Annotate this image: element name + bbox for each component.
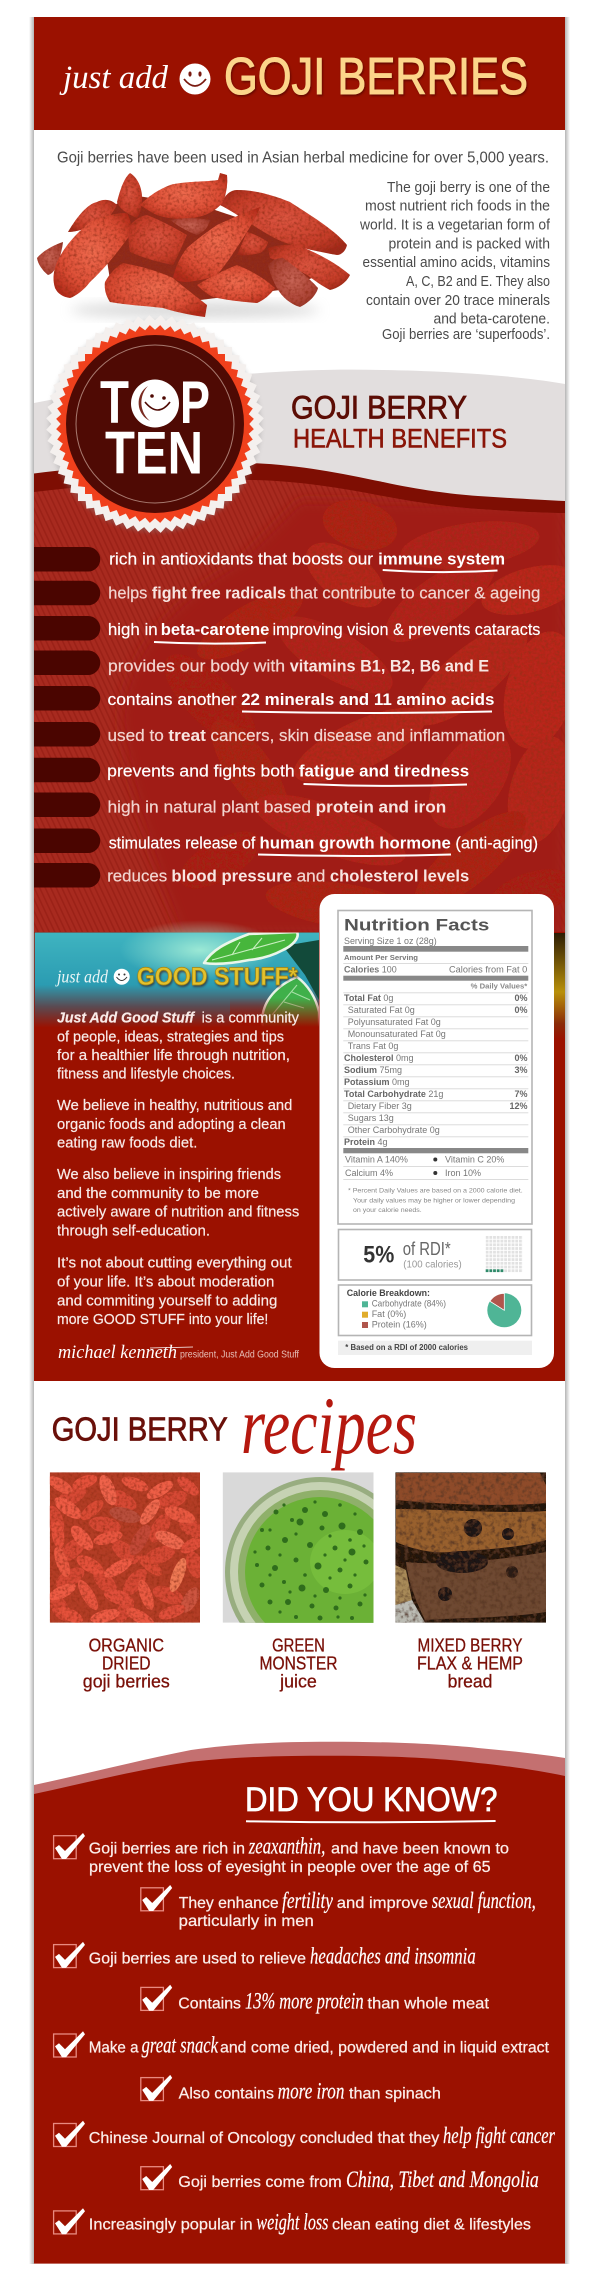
nutrition facts table: Sugars 13g (348, 1113, 394, 1123)
nutrition facts table: Vitamin A 140% (345, 1154, 408, 1164)
caption: ORGANIC (89, 1636, 164, 1656)
benefit 10: and (297, 867, 325, 886)
benefit 6: cancers, skin disease and inflammation (210, 726, 505, 745)
title: GOJI BERRIES (224, 48, 528, 106)
benefit 2 (34, 581, 540, 605)
fact 4: than whole meat (367, 1996, 490, 2012)
nutrition facts table: Monounsaturated Fat 0g (348, 1029, 446, 1039)
community text: is a community (202, 1011, 300, 1027)
benefit 9: human growth hormone (260, 833, 451, 852)
description paragraph: Goji berries are ‘superfoods’. (382, 326, 550, 343)
fact 4 (141, 1985, 490, 2014)
nutrition facts table: Sodium 75mg (344, 1065, 402, 1075)
fact 9: Increasingly popular in (89, 2217, 253, 2234)
benefit 4 (34, 650, 489, 676)
benefit 9 (34, 828, 538, 856)
benefit 5: 22 minerals and 11 amino acids (241, 690, 494, 709)
caption: MONSTER (260, 1653, 338, 1673)
nutrition facts table: Amount Per Serving (344, 953, 418, 962)
heading: goji berry health benefits: GOJI BERRY (291, 389, 467, 425)
community text: and the community to be more (57, 1186, 259, 1202)
benefit 7: prevents and fights both (107, 762, 295, 781)
signature: president, Just Add Good Stuff (180, 1350, 299, 1361)
fact 9 (54, 2208, 531, 2235)
community text: and commiting yourself to adding (57, 1293, 277, 1309)
pie chart (487, 1293, 521, 1327)
community text: of your life. It’s about moderation (57, 1275, 274, 1291)
panel: good stuff (34, 920, 565, 1381)
benefit 4: vitamins B1, B2, B6 and E (290, 657, 489, 676)
heading: goji berry recipes: recipes (241, 1380, 417, 1471)
caption (260, 1636, 338, 1691)
rdi box: 5% (363, 1241, 394, 1268)
fact 1: zeaxanthin, (248, 1834, 325, 1859)
fact 1: and have been known to (331, 1841, 509, 1858)
signature: michael kenneth (58, 1342, 177, 1363)
benefit 10: reduces (107, 867, 167, 886)
nutrition facts table: Vitamin C 20% (445, 1154, 504, 1164)
benefit 3: high in (108, 620, 158, 639)
description paragraph (359, 179, 551, 343)
nutrition facts table: Nutrition Facts (344, 916, 489, 935)
benefit 1 (34, 547, 505, 572)
nutrition facts table: Dietary Fiber 3g (348, 1101, 412, 1111)
nutrition facts table: Calories from Fat 0 (449, 965, 527, 975)
description paragraph: The goji berry is one of the (387, 179, 550, 196)
caption: bread (448, 1671, 492, 1691)
nutrition facts table: 0% (514, 993, 528, 1003)
icon: smiley (114, 969, 130, 985)
nutrition facts table: Cholesterol 0mg (344, 1053, 414, 1063)
grey wave band (34, 370, 565, 530)
good stuff logo: GOOD STUFF* (137, 963, 298, 991)
signature (58, 1342, 299, 1363)
calorie breakdown box: Fat (0%) (372, 1309, 406, 1319)
TEN: TEN (105, 420, 203, 486)
caption: juice (279, 1671, 317, 1691)
illustration: green leaves (202, 932, 319, 1026)
fact 5: great snack (142, 2033, 219, 2058)
community text: for a healthier life through nutrition, (57, 1048, 290, 1064)
fact 8 (141, 2164, 539, 2192)
fact 8: Goji berries come from (178, 2174, 342, 2191)
fact 2: sexual function, (432, 1888, 536, 1913)
description paragraph: essential amino acids, vitamins (362, 254, 550, 271)
fact 7 (54, 2121, 556, 2148)
benefit 5 (34, 686, 494, 713)
calorie breakdown box: Calorie Breakdown: (347, 1288, 430, 1299)
photo: green juice (222, 1472, 374, 1623)
community text: organic foods and adopting a clean (57, 1117, 286, 1133)
benefit 2: fight free radicals (152, 583, 286, 602)
footnote: * Based on a RDI of 2000 calories (345, 1343, 469, 1352)
fact 7: help fight cancer (443, 2123, 556, 2148)
nutrition facts table: Calcium 4% (345, 1168, 393, 1178)
benefit 8: high in natural plant based (108, 798, 311, 817)
fact 2: They enhance (179, 1895, 279, 1912)
fact 5: Make a (89, 2040, 139, 2057)
description paragraph: contain over 20 trace minerals (366, 292, 550, 309)
fact 2 (141, 1885, 536, 1930)
benefit 9: (anti-aging) (455, 833, 538, 852)
just add: just add (59, 60, 168, 96)
nutrition facts table: % Daily Values* (471, 983, 528, 990)
community text: Just Add Good Stuff (57, 1011, 196, 1027)
rdi box: (100 calories) (403, 1260, 462, 1271)
community text: of people, ideas, strategies and tips (57, 1030, 284, 1046)
benefit 1: rich in antioxidants that boosts our (109, 550, 373, 569)
fact 8: China, Tibet and Mongolia (346, 2167, 539, 2192)
fact 5: and come dried, powdered and in liquid extract (220, 2040, 550, 2057)
fact 2: fertility (282, 1888, 334, 1913)
intro line: Goji berries have been used in Asian herbal medicine for over 5,000 years. (57, 150, 549, 166)
fact 3: headaches and insomnia (310, 1944, 476, 1969)
community text: We believe in healthy, nutritious and (57, 1098, 292, 1114)
benefit 3: improving vision & prevents cataracts (272, 620, 540, 639)
benefit 3 (34, 616, 540, 644)
benefit 4: provides our body with (108, 657, 285, 676)
benefit 8: protein and iron (316, 798, 446, 817)
nutrition facts table: Other Carbohydrate 0g (348, 1125, 440, 1135)
nutrition facts table: Calories 100 (344, 965, 397, 975)
benefit 5: contains another (108, 690, 237, 709)
rdi box (338, 1230, 532, 1280)
photo: bread (395, 1472, 546, 1623)
benefit 6 (34, 722, 505, 746)
heading: goji berry health benefits: HEALTH BENEFITS (293, 424, 507, 454)
fact 4: Contains (178, 1996, 241, 2012)
nutrition facts table: Saturated Fat 0g (348, 1005, 415, 1015)
fact 9: clean eating diet & lifestyles (332, 2217, 531, 2234)
caption (83, 1636, 170, 1691)
heading: goji berry recipes: GOJI BERRY (52, 1411, 228, 1448)
benefit 3: beta-carotene (161, 620, 269, 639)
community text: more GOOD STUFF into your life! (57, 1312, 268, 1328)
community text: We also believe in inspiring friends (57, 1167, 281, 1183)
badge: top ten (46, 315, 264, 533)
community text: fitness and lifestyle choices. (57, 1067, 235, 1083)
nutrition facts table (338, 910, 532, 1224)
rdi box: of RDI* (403, 1239, 451, 1259)
nutrition facts table: Your daily values may be higher or lower depending (353, 1198, 515, 1205)
wave: pale red band (34, 1742, 565, 1800)
benefit 9: stimulates release of (109, 833, 256, 852)
nutrition facts table: Protein 4g (344, 1137, 388, 1147)
nutrition facts table: on your calorie needs. (353, 1207, 422, 1214)
nutrition facts table: Potassium 0mg (344, 1077, 410, 1087)
TOP (100, 369, 210, 436)
fact 6: more iron (278, 2078, 344, 2103)
description paragraph: protein and is packed with (388, 236, 550, 253)
panel: nutrition (320, 894, 554, 1368)
nutrition facts table: Iron 10% (445, 1168, 481, 1178)
fact 3: Goji berries are used to relieve (89, 1951, 306, 1968)
nutrition facts table: * Percent Daily Values are based on a 2000 calorie diet. (348, 1188, 523, 1195)
community text: It’s not about cutting everything out (57, 1256, 292, 1272)
nutrition facts table: 0% (514, 1005, 528, 1015)
description paragraph: world. It is a vegetarian form of (359, 217, 551, 234)
just add: just add (55, 967, 109, 987)
benefit 10 (34, 863, 469, 888)
recipe: green monster juice (222, 1472, 374, 1692)
icon: smiley O (131, 380, 179, 428)
description paragraph: A, C, B2 and E. They also (406, 273, 550, 290)
illustration: pile of goji berries (37, 173, 350, 318)
benefit 6: treat (168, 726, 206, 745)
nutrition facts table: Total Carbohydrate 21g (344, 1089, 443, 1099)
nutrition facts table: 12% (509, 1101, 528, 1111)
heading: goji berry recipes (52, 1380, 417, 1471)
fact 4: 13% more protein (245, 1988, 364, 2014)
community text: eating raw foods diet. (57, 1136, 197, 1152)
fact 1 (54, 1833, 509, 1876)
community text: through self-education. (57, 1223, 210, 1239)
caption: GREEN (272, 1636, 325, 1656)
fact 1: prevent the loss of eyesight in people over the age of 65 (89, 1859, 491, 1876)
benefit 10: blood pressure (171, 867, 292, 886)
fact 2: and improve (337, 1895, 428, 1912)
benefit 7 (34, 758, 469, 786)
benefit 2: that contribute to cancer & ageing (290, 583, 540, 602)
caption: goji berries (83, 1671, 170, 1691)
benefit 10: cholesterol levels (330, 867, 469, 886)
fact 3 (54, 1942, 476, 1969)
benefit 7: fatigue and tiredness (299, 762, 469, 781)
benefit 1: immune system (378, 550, 505, 569)
nutrition facts table: Polyunsaturated Fat 0g (348, 1017, 441, 1027)
fact 6 (141, 2075, 441, 2103)
nutrition facts table: 3% (514, 1065, 528, 1075)
fact 9: weight loss (256, 2210, 328, 2235)
dot grid (486, 1236, 523, 1273)
fact 2: particularly in men (179, 1913, 314, 1930)
description paragraph: and beta-carotene. (434, 311, 550, 328)
list: ten health benefits (34, 547, 540, 888)
nutrition facts table: 0% (514, 1053, 528, 1063)
panel: top ten benefits background (34, 470, 588, 937)
benefit 6: used to (108, 726, 164, 745)
TOP: P (180, 369, 210, 436)
nutrition facts table: Total Fat 0g (344, 993, 393, 1003)
nutrition facts table: 7% (514, 1089, 528, 1099)
benefit 2: helps (108, 583, 147, 602)
footnote (338, 1341, 532, 1355)
photo: dried goji berries (50, 1472, 200, 1623)
fact 7: Chinese Journal of Oncology concluded that they (89, 2130, 439, 2147)
nutrition facts table: Serving Size 1 oz (28g) (344, 936, 437, 946)
recipe: mixed berry bread (395, 1472, 546, 1691)
caption: DRIED (102, 1653, 151, 1673)
community text: actively aware of nutrition and fitness (57, 1205, 299, 1221)
fact 1: Goji berries are rich in (89, 1841, 245, 1858)
caption: FLAX & HEMP (417, 1653, 523, 1673)
panel: did you know (34, 1756, 565, 2264)
nutrition facts table: Trans Fat 0g (348, 1041, 398, 1051)
fact 6: than spinach (349, 2085, 441, 2102)
icon: smiley (180, 64, 210, 94)
dark red wave (34, 462, 565, 530)
community text (57, 1011, 300, 1328)
fact 6: Also contains (179, 2085, 274, 2102)
heading: DID YOU KNOW? (245, 1781, 498, 1819)
calorie breakdown box: Carbohydrate (84%) (372, 1299, 446, 1309)
fact 5 (54, 2031, 550, 2058)
caption (417, 1636, 523, 1691)
header banner (34, 17, 565, 130)
caption: MIXED BERRY (418, 1636, 522, 1656)
calorie breakdown box (338, 1285, 532, 1336)
recipe: organic dried goji berries (42, 1472, 208, 1691)
description paragraph: most nutrient rich foods in the (365, 198, 550, 215)
calorie breakdown box: Protein (16%) (372, 1319, 427, 1329)
heading: goji berry health benefits (291, 389, 507, 454)
TOP: T (100, 369, 129, 436)
benefit 8 (34, 792, 446, 817)
